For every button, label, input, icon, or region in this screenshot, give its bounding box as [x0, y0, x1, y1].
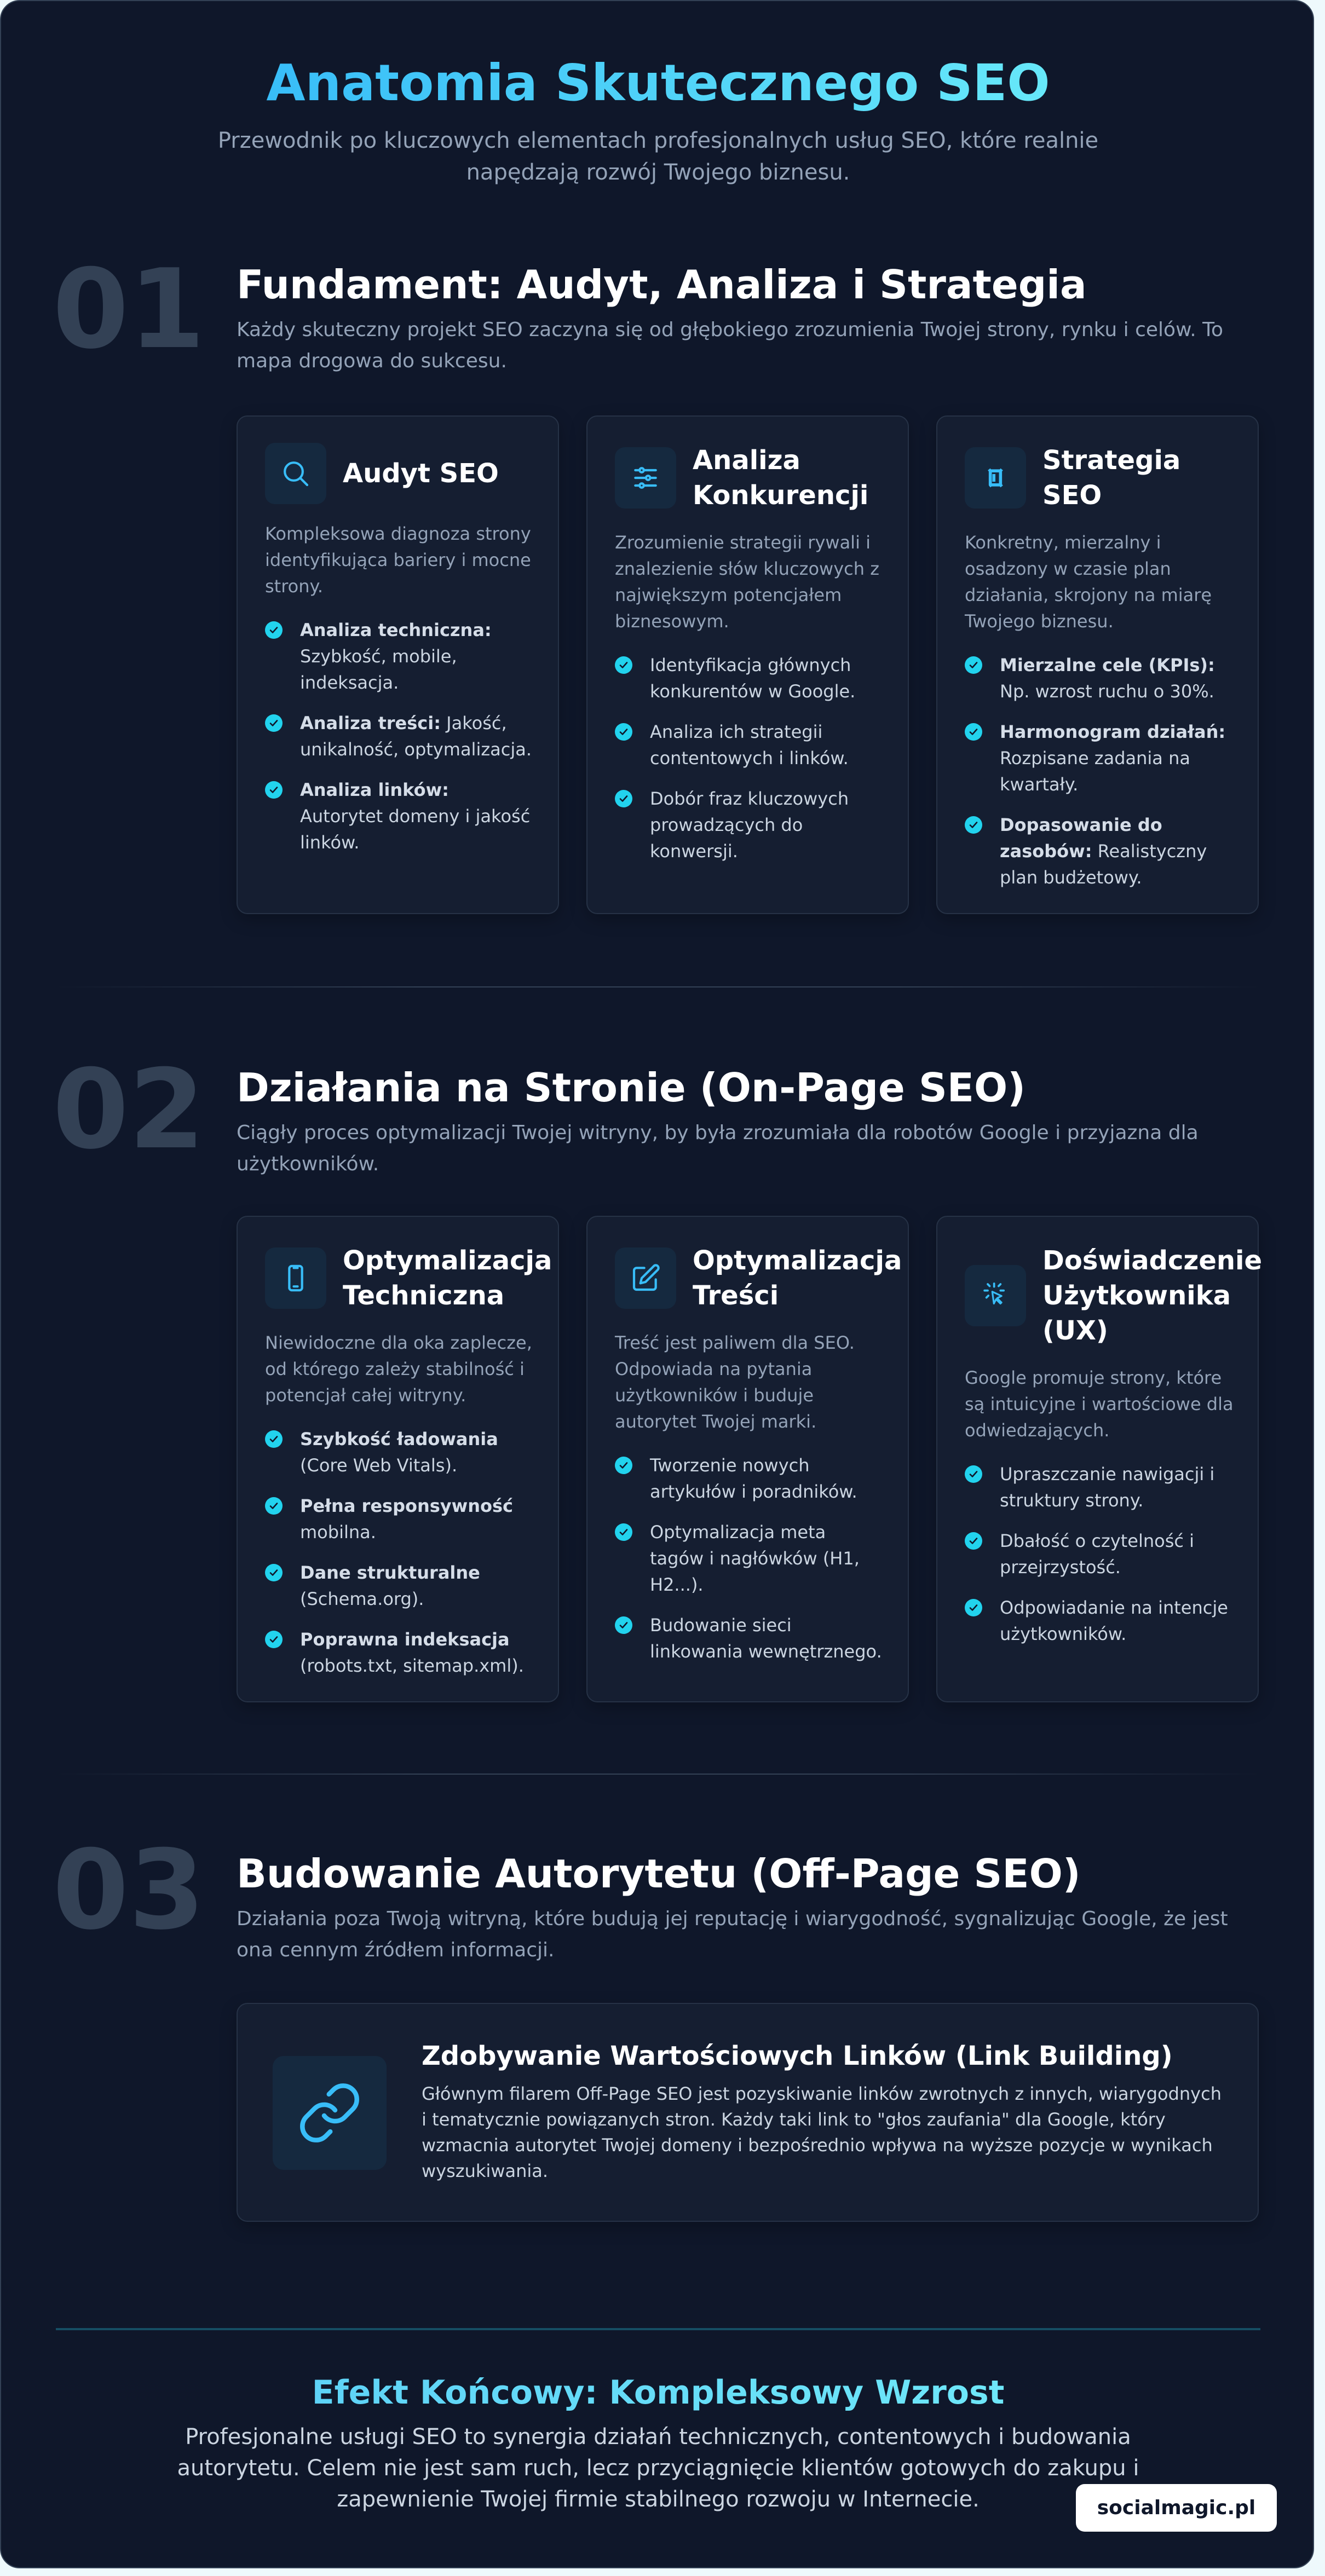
card: Optymalizacja Treści: artykułów i poradników.: [650, 1481, 857, 1502]
subtitle: napędzają rozwój Twojego biznesu.: [466, 160, 850, 185]
card: Doświadczenie Użytkownika: użytkowników.: [1000, 1624, 1126, 1644]
section 03 heading: Działania poza Twoją witryną, które budują jej reputację i wiarygodność, sygnalizując Google, że jest: [237, 1908, 1228, 1930]
section 01 heading: [237, 262, 1223, 372]
card: Audyt SEO: Audyt SEO: [343, 458, 499, 489]
card: Audyt SEO: identyfikująca bariery i mocne: [265, 550, 531, 570]
card: Analiza Konkurencji: prowadzących do: [650, 815, 803, 835]
card: Optymalizacja Techniczna: Optymalizacja: [343, 1245, 552, 1276]
card: Analiza Konkurencji: Analiza ich strategii: [650, 721, 822, 742]
section 01 heading: mapa drogowa do sukcesu.: [237, 350, 507, 372]
card: Strategia SEO: Mierzalne cele (KPIs):: [1000, 655, 1215, 675]
card: Strategia SEO: Rozpisane zadania na: [1000, 748, 1190, 769]
title: Anatomia Skutecznego SEO: [266, 54, 1050, 112]
card: Optymalizacja Treści: Optymalizacja meta: [650, 1522, 826, 1543]
card: Doświadczenie Użytkownika: Doświadczenie: [1042, 1245, 1262, 1276]
card: Optymalizacja Techniczna: mobilna.: [300, 1522, 376, 1543]
card: Analiza Konkurencji: Dobór fraz kluczowych: [650, 788, 849, 809]
section 03 heading: ona cennym źródłem informacji.: [237, 1939, 554, 1961]
card: Strategia SEO: Konkretny, mierzalny i: [965, 532, 1161, 553]
link building text: Zdobywanie Wartościowych Linków (Link Building): [422, 2041, 1173, 2071]
number 02: 02: [53, 1046, 205, 1174]
subtitle: Przewodnik po kluczowych elementach profesjonalnych usług SEO, które realnie: [218, 128, 1098, 153]
icon: edit: [615, 1247, 676, 1309]
card: Link Building: [237, 2003, 1259, 2222]
section 03 heading: Budowanie Autorytetu (Off-Page SEO): [237, 1851, 1081, 1897]
card: Audyt SEO: [237, 415, 559, 914]
subtitle: [218, 128, 1098, 185]
icon: cursor click: [965, 1265, 1026, 1326]
card: Optymalizacja Techniczna: (Schema.org).: [300, 1589, 424, 1609]
section 02 heading: Działania na Stronie (On-Page SEO): [237, 1065, 1026, 1111]
icon: phone: [265, 1247, 326, 1309]
card: Optymalizacja Treści: tagów i nagłówków (H1,: [650, 1548, 860, 1569]
card: Optymalizacja Treści: Odpowiada na pytania: [615, 1359, 812, 1379]
card: Strategia SEO: Strategia: [1042, 445, 1180, 476]
card: Audyt SEO: Szybkość, mobile,: [300, 646, 457, 667]
card: Optymalizacja Techniczna: Dane strukturalne: [300, 1562, 480, 1583]
card: Audyt SEO: indeksacja.: [300, 672, 399, 693]
section 01 heading: Każdy skuteczny projekt SEO zaczyna się od głębokiego zrozumienia Twojej strony, rynku i celów. To: [237, 319, 1223, 341]
card: Optymalizacja Treści: H2...).: [650, 1574, 704, 1595]
card: Optymalizacja Techniczna: Szybkość ładowania: [300, 1429, 498, 1449]
card: Analiza Konkurencji: Identyfikacja głównych: [650, 655, 851, 675]
card: Audyt SEO: strony.: [265, 576, 323, 597]
link building text: [422, 2041, 1222, 2181]
card: Strategia SEO: Np. wzrost ruchu o 30%.: [1000, 681, 1214, 702]
card: Audyt SEO: linków.: [300, 832, 359, 853]
card: Strategia SEO: Dopasowanie do: [1000, 815, 1162, 835]
section 02 heading: [237, 1065, 1199, 1175]
icon: search: [265, 443, 326, 504]
card: Doświadczenie Użytkownika: Użytkownika: [1042, 1280, 1231, 1311]
number 01: 01: [53, 246, 205, 373]
card: Optymalizacja Techniczna: Poprawna indeksacja: [300, 1629, 510, 1650]
number 03: 03: [53, 1827, 205, 1954]
card: Analiza Konkurencji: Konkurencji: [693, 480, 868, 511]
link building text: Głównym filarem Off-Page SEO jest pozyskiwanie linków zwrotnych z innych, wiarygodnych: [422, 2083, 1222, 2104]
card: Optymalizacja Treści: linkowania wewnętrznego.: [650, 1641, 882, 1662]
card: Optymalizacja Techniczna: Techniczna: [343, 1280, 504, 1311]
card: Optymalizacja Treści: [586, 1216, 909, 1702]
card: Strategia SEO: SEO: [1042, 480, 1102, 511]
card: Optymalizacja Treści: Treść jest paliwem dla SEO.: [615, 1332, 855, 1353]
card: Analiza Konkurencji: [586, 415, 909, 914]
card: Doświadczenie Użytkownika: Google promuje strony, które: [965, 1367, 1222, 1388]
card: Strategia SEO: osadzony w czasie plan: [965, 558, 1171, 579]
card: Audyt SEO: unikalność, optymalizacja.: [300, 739, 532, 760]
card: Optymalizacja Treści: Treści: [693, 1280, 779, 1311]
card: Optymalizacja Techniczna: Pełna responsywność: [300, 1495, 513, 1516]
link building text: i tematycznie powiązanych stron. Każdy taki link to "głos zaufania" dla Google, który: [422, 2109, 1166, 2130]
card: Optymalizacja Treści: Budowanie sieci: [650, 1615, 792, 1636]
card: Analiza Konkurencji: największym potencjałem: [615, 585, 842, 605]
card: Doświadczenie Użytkownika: są intuicyjne i wartościowe dla: [965, 1394, 1234, 1414]
link building text: wzmacnia autorytet Twojej domeny i bezpośrednio wpływa na wyższe pozycje w wynikach: [422, 2135, 1213, 2156]
icon: sliders: [615, 447, 676, 509]
section 02 heading: użytkowników.: [237, 1153, 379, 1175]
card: Doświadczenie Użytkownika: struktury strony.: [1000, 1490, 1143, 1511]
card: Analiza Konkurencji: contentowych i linków.: [650, 748, 849, 769]
card: Strategia SEO: działania, skrojony na miarę: [965, 585, 1212, 605]
footer text: zapewnienie Twojej firmie stabilnego rozwoju w Internecie.: [337, 2487, 980, 2512]
card: Optymalizacja Techniczna: (Core Web Vitals).: [300, 1455, 457, 1476]
card: Strategia SEO: plan budżetowy.: [1000, 867, 1142, 888]
card: Strategia SEO: zasobów: Realistyczny: [1000, 841, 1207, 862]
card: Analiza Konkurencji: biznesowym.: [615, 611, 729, 632]
footer text: autorytetu. Celem nie jest sam ruch, lecz przyciągnięcie klientów gotowych do zakupu i: [177, 2456, 1139, 2481]
card: Analiza Konkurencji: znalezienie słów kluczowych z: [615, 558, 879, 579]
footer title: Efekt Końcowy: Kompleksowy Wzrost: [312, 2373, 1004, 2412]
card: Doświadczenie Użytkownika: Odpowiadanie na intencje: [1000, 1597, 1228, 1618]
card: Optymalizacja Techniczna: (robots.txt, sitemap.xml).: [300, 1655, 524, 1676]
card: Doświadczenie Użytkownika: Dbałość o czytelność i: [1000, 1530, 1194, 1551]
card: Doświadczenie Użytkownika: (UX): [1042, 1315, 1108, 1346]
card: Analiza Konkurencji: Zrozumienie strategii rywali i: [615, 532, 871, 553]
card: Audyt SEO: Analiza linków:: [300, 779, 449, 800]
card: Analiza Konkurencji: konwersji.: [650, 841, 738, 862]
card: Optymalizacja Treści: Optymalizacja: [693, 1245, 902, 1276]
card: Doświadczenie Użytkownika: przejrzystość.: [1000, 1557, 1121, 1578]
card: Optymalizacja Techniczna: [237, 1216, 559, 1702]
section 01 heading: Fundament: Audyt, Analiza i Strategia: [237, 262, 1087, 308]
card: Strategia SEO: [936, 415, 1259, 914]
card: Doświadczenie Użytkownika: [936, 1216, 1259, 1702]
card: Audyt SEO: Analiza techniczna:: [300, 620, 492, 640]
card: Doświadczenie Użytkownika: Upraszczanie nawigacji i: [1000, 1464, 1214, 1485]
card: Audyt SEO: Kompleksowa diagnoza strony: [265, 523, 531, 544]
card: Audyt SEO: Autorytet domeny i jakość: [300, 806, 530, 827]
footer text: Profesjonalne usługi SEO to synergia działań technicznych, contentowych i budowania: [185, 2424, 1131, 2450]
card: Analiza Konkurencji: Analiza: [693, 445, 800, 476]
card: Optymalizacja Techniczna: od którego zależy stabilność i: [265, 1359, 525, 1379]
card: Optymalizacja Treści: Tworzenie nowych: [650, 1455, 810, 1476]
card: Analiza Konkurencji: konkurentów w Google.: [650, 681, 855, 702]
card: Strategia SEO: Harmonogram działań:: [1000, 721, 1225, 742]
link building text: wyszukiwania.: [422, 2161, 548, 2181]
card: Audyt SEO: Analiza treści: Jakość,: [300, 713, 507, 733]
section 02 heading: Ciągły proces optymalizacji Twojej witryny, by była zrozumiała dla robotów Google i przyjazna dla: [237, 1122, 1199, 1144]
icon: strategy: [965, 447, 1026, 509]
card: Doświadczenie Użytkownika: odwiedzających.: [965, 1420, 1109, 1441]
card: Strategia SEO: Twojego biznesu.: [965, 611, 1114, 632]
section 03 heading: [237, 1851, 1228, 1961]
card: Optymalizacja Treści: użytkowników i buduje: [615, 1385, 814, 1406]
card: Optymalizacja Treści: autorytet Twojej marki.: [615, 1411, 816, 1432]
card: Optymalizacja Techniczna: Niewidoczne dla oka zaplecze,: [265, 1332, 532, 1353]
card: Optymalizacja Techniczna: potencjał całej witryny.: [265, 1385, 466, 1406]
badge: socialmagic.pl: [1076, 2484, 1277, 2532]
footer text: [177, 2424, 1139, 2512]
icon: link: [273, 2056, 387, 2170]
badge: socialmagic.pl: socialmagic.pl: [1097, 2497, 1255, 2519]
card: Strategia SEO: kwartały.: [1000, 774, 1078, 795]
